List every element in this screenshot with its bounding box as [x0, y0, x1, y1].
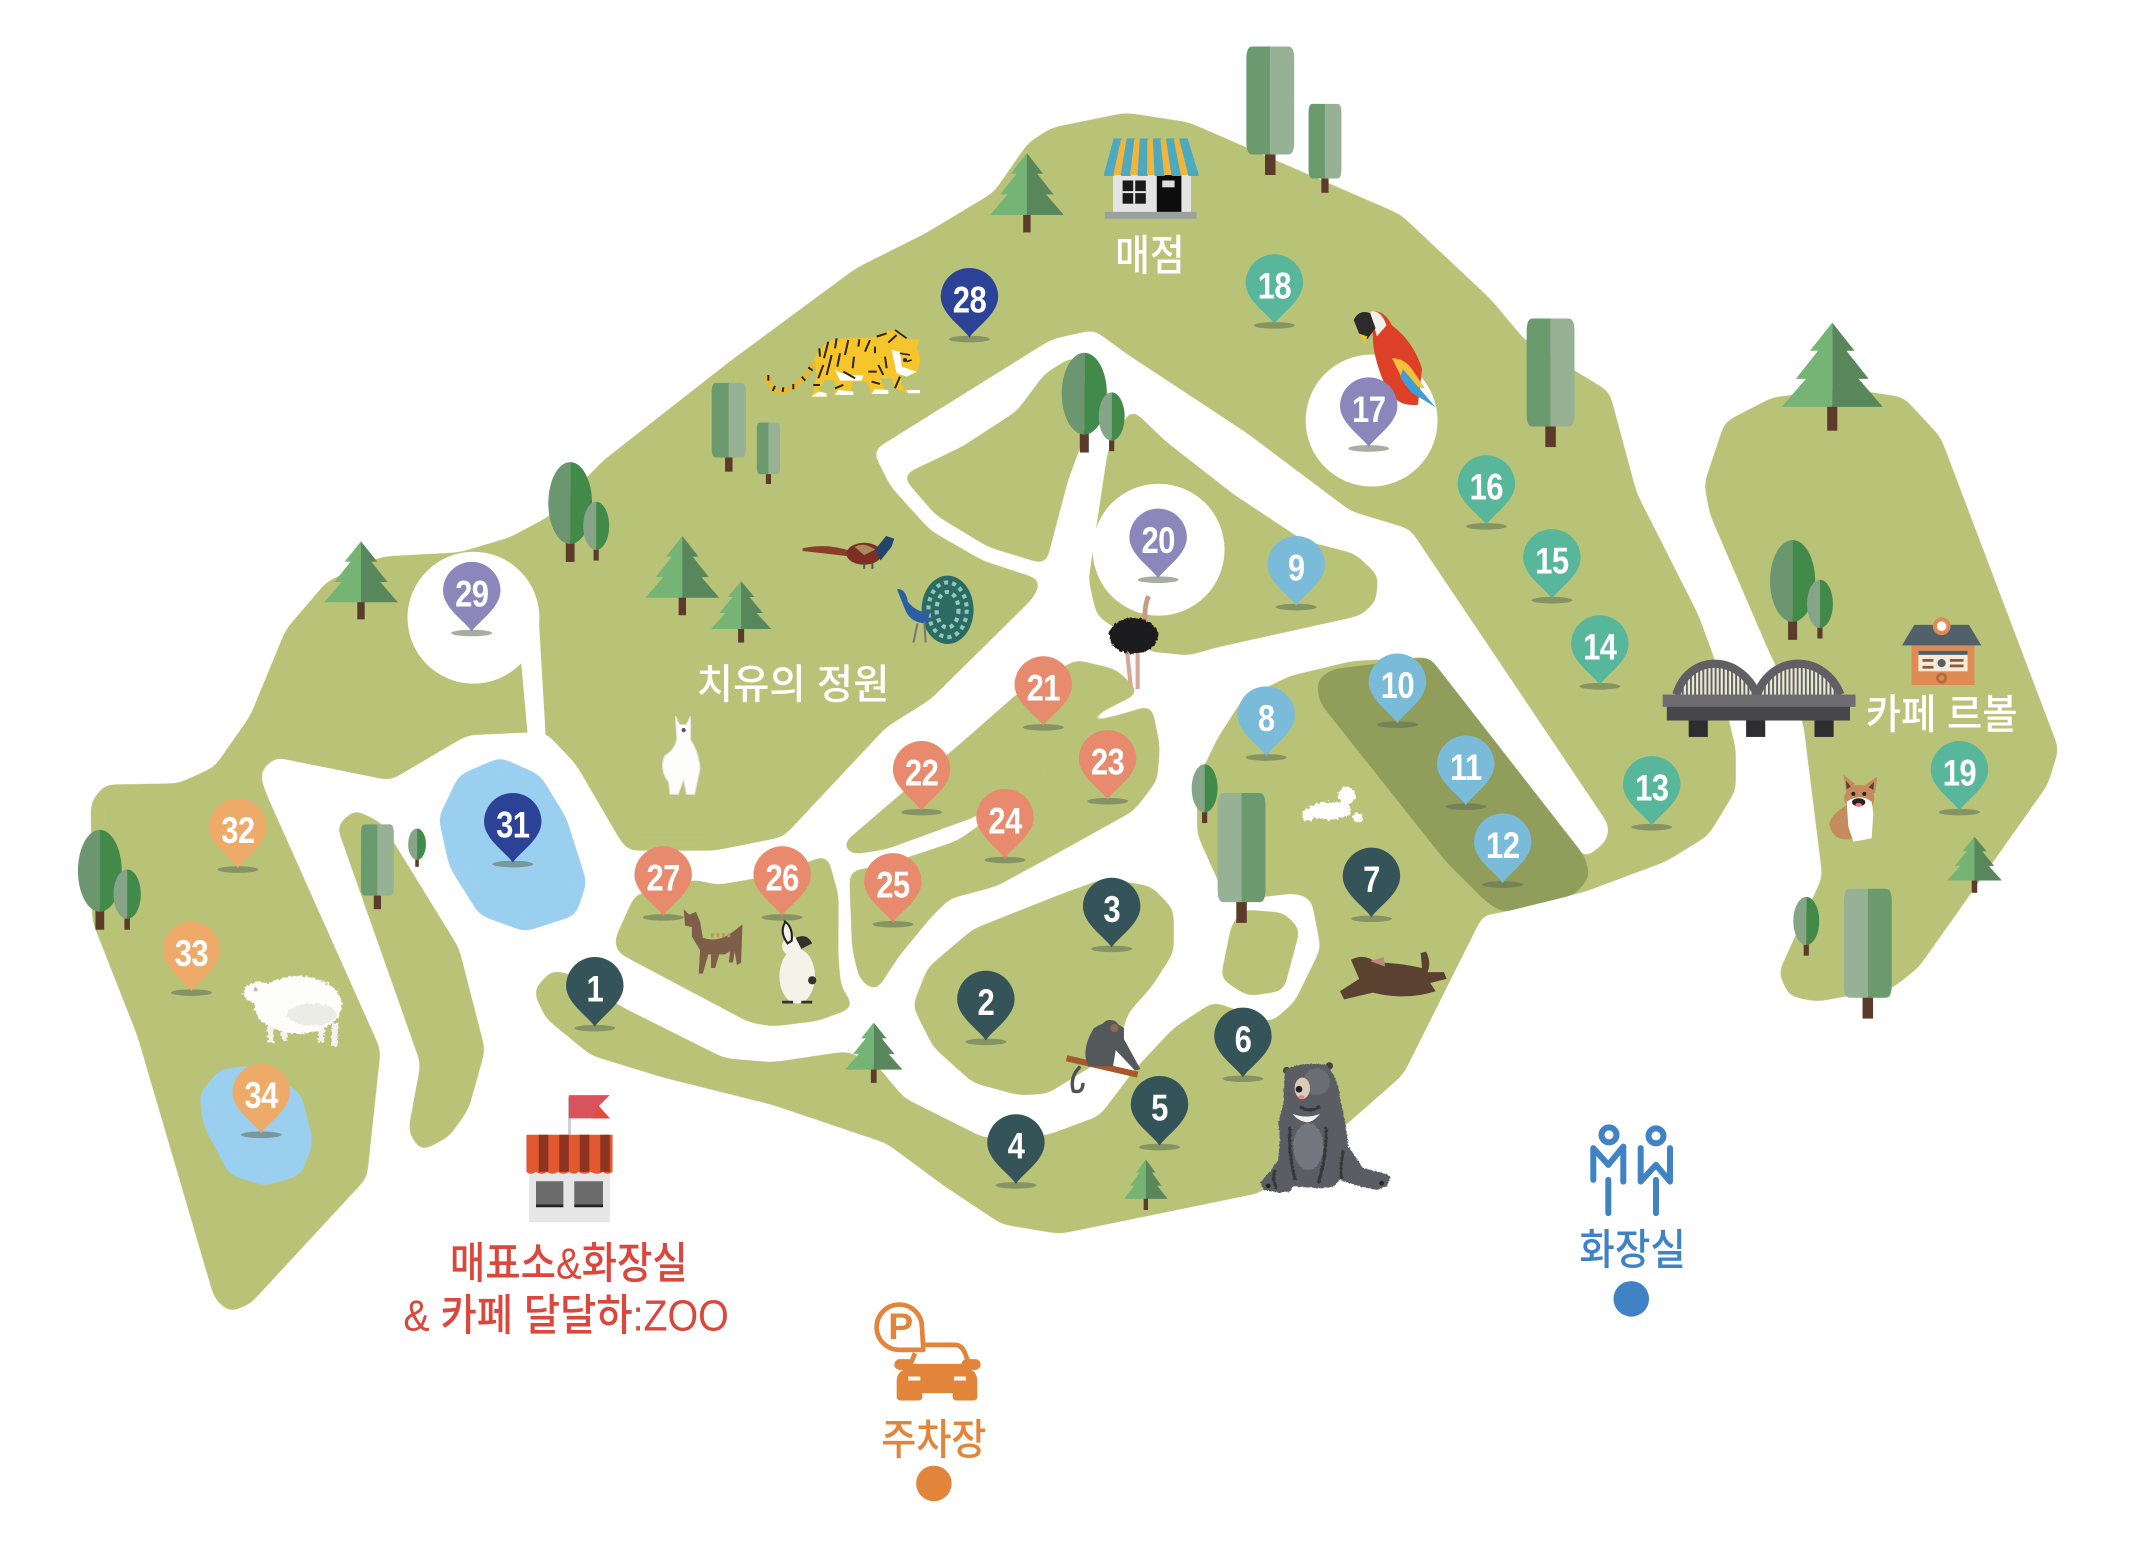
pin 19: 19 [1943, 753, 1976, 794]
pin 4 [987, 1114, 1045, 1189]
pin 14 [1571, 615, 1629, 690]
label: parking: 주차장 [881, 1417, 987, 1464]
icon: parking with car [877, 1305, 981, 1401]
pin 16 [1458, 455, 1515, 530]
pin 9 [1268, 536, 1325, 610]
pins [163, 254, 1988, 1189]
icon: ticket office [526, 1095, 613, 1222]
pin 17: 17 [1352, 389, 1385, 430]
white plazas and connector path [407, 355, 1438, 735]
pin 24 [976, 789, 1034, 863]
pin 26 [753, 846, 811, 921]
pin 1: 1 [586, 969, 603, 1010]
pin 23: 23 [1091, 742, 1124, 783]
animal: sheep [243, 976, 342, 1046]
pin 8: 8 [1258, 698, 1275, 739]
pin 27: 27 [646, 858, 680, 899]
pin 2: 2 [978, 983, 994, 1024]
pin 27 [634, 846, 692, 921]
pin 6 [1214, 1008, 1272, 1082]
pin 18 [1246, 254, 1303, 329]
pin 3 [1083, 878, 1140, 952]
pin 17 [1340, 377, 1397, 452]
pin 28: 28 [953, 280, 986, 321]
pin 5: 5 [1151, 1088, 1168, 1129]
animal: sun bear [1260, 1062, 1391, 1193]
pin 10 [1369, 654, 1426, 728]
pin 18: 18 [1258, 266, 1291, 307]
pin 25 [864, 853, 922, 928]
icon: kiosk shop [1105, 139, 1198, 219]
pin 11: 11 [1450, 748, 1482, 789]
pin 22: 22 [905, 753, 938, 794]
pin 5 [1131, 1076, 1188, 1150]
ponds [199, 757, 587, 1186]
pin 23 [1079, 730, 1136, 804]
animal: corgi [1829, 775, 1877, 842]
icon: cafe building [1902, 619, 1981, 685]
pin 25: 25 [876, 865, 910, 906]
pin 9: 9 [1288, 548, 1305, 589]
pin 20 [1129, 509, 1187, 583]
animal: brown dog [1340, 952, 1447, 999]
pin 13 [1623, 756, 1680, 830]
pin 24: 24 [988, 801, 1022, 842]
pin 32: 32 [221, 810, 255, 852]
animal: ostrich [1109, 596, 1158, 689]
label: healing garden: 치유의 정원 [697, 662, 889, 708]
pin 32 [209, 798, 267, 873]
pin 34 [232, 1064, 290, 1138]
icon: restroom figures [1593, 1127, 1670, 1213]
pin 6: 6 [1235, 1020, 1251, 1061]
pin 31 [484, 793, 541, 867]
pin 10: 10 [1381, 665, 1414, 707]
pin 21 [1015, 656, 1072, 731]
pin 29: 29 [455, 574, 488, 615]
pin 13: 13 [1635, 768, 1668, 809]
pin 34: 34 [244, 1076, 278, 1117]
pin 14: 14 [1583, 627, 1617, 668]
icon: arch bridge [1663, 662, 1855, 737]
pin 15 [1523, 529, 1581, 603]
label: cafe le bol: 카페 르볼 [1866, 692, 2018, 738]
animal: monkey [1067, 1020, 1140, 1092]
label: ticket office, restroom, cafe [403, 1239, 729, 1340]
zoo map grounds [91, 113, 2059, 1312]
pin 12 [1474, 813, 1531, 888]
pin 7: 7 [1363, 860, 1380, 901]
marker: restroom dot [1613, 1281, 1649, 1317]
label: shop: 매점 [1115, 233, 1185, 280]
icon: parking with car: P [888, 1305, 913, 1347]
animal: rabbit [779, 922, 816, 1004]
pin 21: 21 [1027, 668, 1060, 709]
pin 19 [1931, 741, 1988, 815]
pin 26: 26 [765, 858, 799, 899]
pin 15: 15 [1535, 541, 1569, 582]
animal: white poodle [1302, 787, 1363, 822]
animal: parrot [1354, 311, 1436, 407]
pin 16: 16 [1470, 467, 1503, 508]
animal: deer [684, 909, 742, 973]
pin 8 [1237, 686, 1295, 761]
pin 4: 4 [1008, 1126, 1025, 1167]
trees [78, 46, 2002, 1210]
park land [91, 113, 2059, 1312]
label: ticket office, restroom, cafe: 매표소&화장실 [450, 1239, 688, 1288]
pin 33: 33 [175, 933, 208, 975]
label: ticket office, restroom, cafe: & 카페 달달하:ZOO [403, 1291, 729, 1340]
pin 31: 31 [496, 805, 529, 846]
pin 3: 3 [1103, 890, 1120, 931]
pin 2 [957, 971, 1015, 1045]
pin 22 [893, 741, 950, 815]
pin 28 [941, 268, 998, 342]
pin 1 [566, 957, 624, 1031]
pin 20: 20 [1141, 521, 1175, 562]
pin 7 [1343, 848, 1400, 922]
animal: llama [663, 716, 700, 794]
pin 29 [443, 562, 500, 636]
animal: pheasant [803, 536, 894, 569]
label: restroom: 화장실 [1579, 1227, 1686, 1274]
animal: tiger [768, 330, 921, 397]
animal: peacock [897, 576, 974, 644]
pin 11 [1437, 736, 1495, 810]
pin 33 [163, 922, 220, 996]
pin 12: 12 [1486, 825, 1519, 867]
olive planting zone [1317, 657, 1590, 912]
marker: parking dot [916, 1466, 952, 1501]
